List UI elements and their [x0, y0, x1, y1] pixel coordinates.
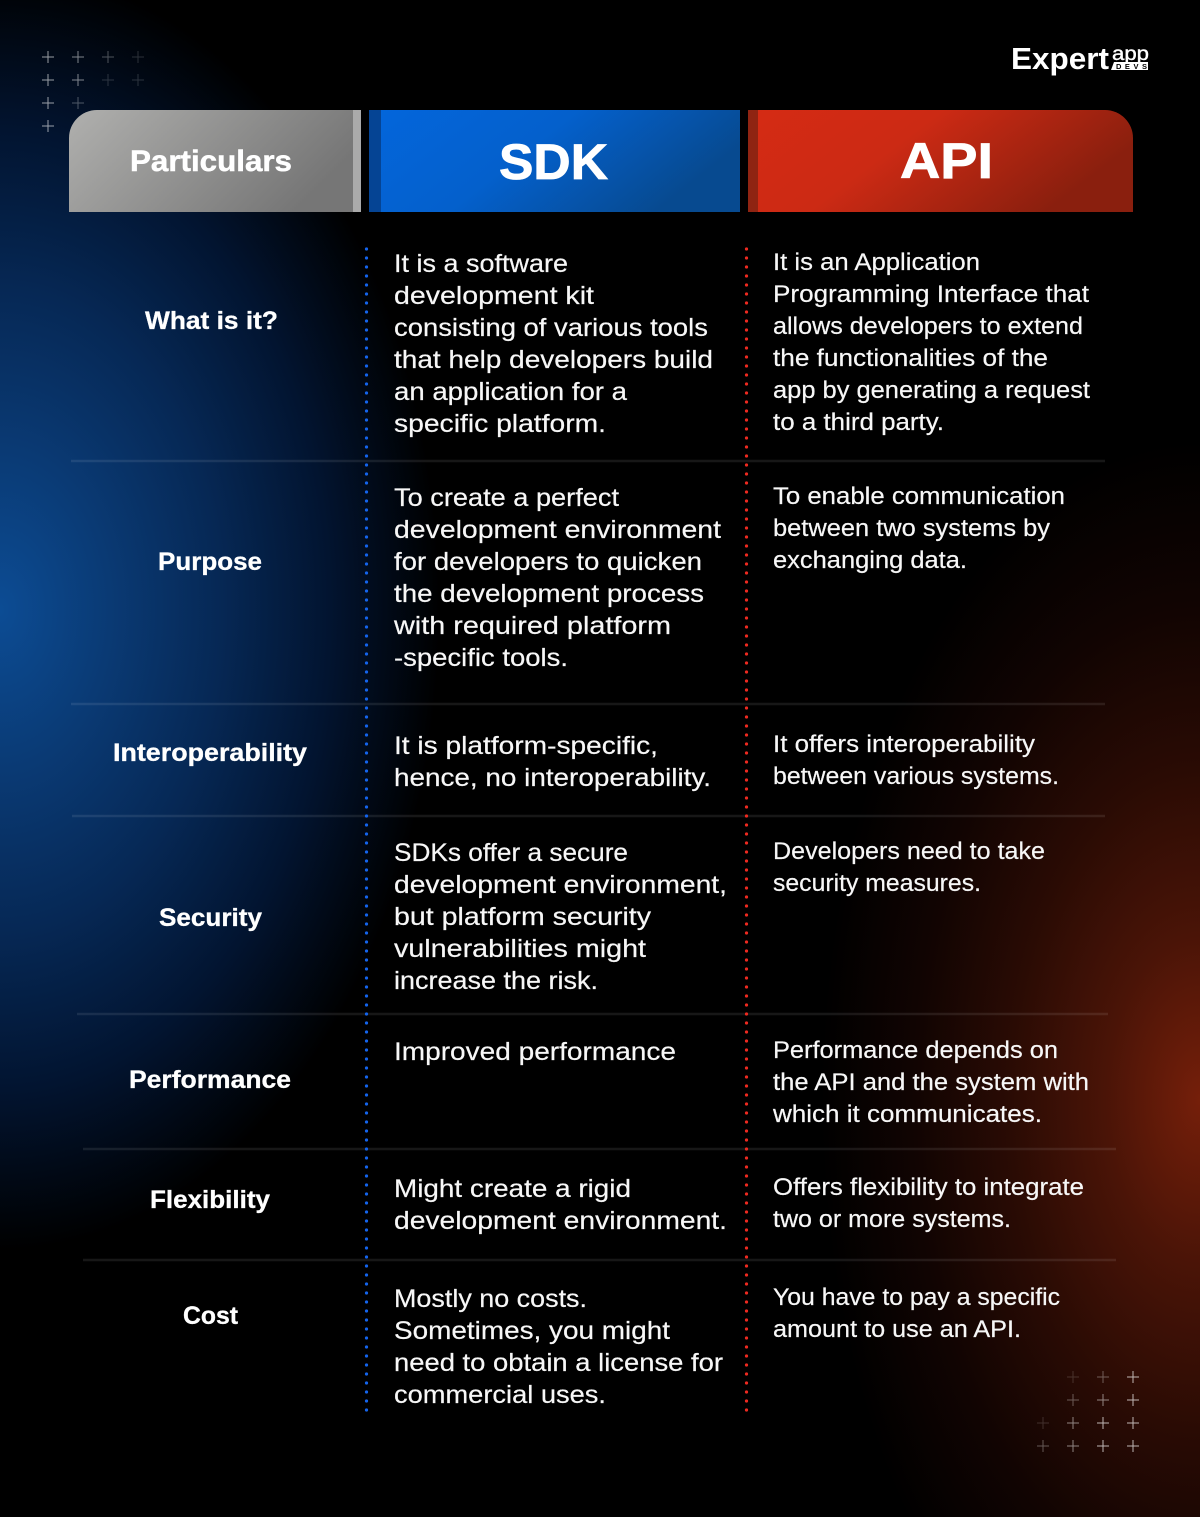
SDK: purpose: -specific tools. [394, 644, 568, 672]
label: Interoperability: Interoperability [113, 739, 307, 767]
SDK: interoperability: It is platform-specific, [394, 732, 658, 760]
SDK: purpose: the development process [394, 580, 704, 608]
API: what is it: Programming Interface that [773, 281, 1089, 308]
SDK: purpose: development environment [394, 516, 721, 544]
row dividers [71, 461, 1116, 1260]
SDK: security: but platform security [394, 903, 652, 931]
API: flexibility [773, 1174, 1084, 1233]
SDK: purpose [393, 484, 721, 672]
API: what is it: allows developers to extend [773, 313, 1083, 340]
SDK: security: increase the risk. [394, 967, 598, 995]
header: SDK: SDK [499, 134, 608, 190]
SDK: cost [394, 1285, 723, 1409]
API: what is it: the functionalities of the [773, 345, 1048, 372]
API: purpose: exchanging data. [773, 547, 967, 574]
SDK: what is it [394, 250, 713, 438]
SDK: security: vulnerabilities might [394, 935, 646, 963]
SDK: interoperability: hence, no interoperability. [394, 764, 711, 792]
SDK: cost: Mostly no costs. [394, 1285, 587, 1313]
API: what is it [773, 249, 1090, 436]
header: API: API [900, 133, 993, 189]
SDK: cost: Sometimes, you might [394, 1317, 670, 1345]
logo: Expert app devs [1011, 41, 1149, 76]
API: what is it: It is an Application [773, 249, 980, 276]
SDK: cost: commercial uses. [394, 1381, 606, 1409]
SDK: cost: need to obtain a license for [394, 1349, 723, 1377]
header: Particulars: Particulars [130, 145, 292, 178]
API: cost: amount to use an API. [773, 1316, 1021, 1343]
API: performance: which it communicates. [772, 1101, 1042, 1128]
API: performance: Performance depends on [773, 1037, 1058, 1064]
SDK: performance: Improved performance [394, 1038, 676, 1066]
API: security: Developers need to take [773, 838, 1045, 865]
header: Particulars [69, 110, 361, 212]
SDK: what is it: It is a software [394, 250, 568, 278]
SDK: purpose: for developers to quicken [394, 548, 702, 576]
API: security [773, 838, 1045, 897]
logo: Expert app devs: DEVS [1116, 62, 1147, 71]
API: interoperability: It offers interoperability [773, 731, 1035, 758]
label: What is it?: What is it? [145, 307, 278, 335]
decorative plus grid bottom right [1037, 1371, 1139, 1452]
dotted divider: SDK column [365, 249, 368, 1413]
API: performance: the API and the system with [773, 1069, 1089, 1096]
header: API [748, 110, 1133, 212]
API: interoperability: between various systems. [773, 763, 1059, 790]
logo: Expert app devs: Expert [1011, 41, 1109, 76]
decorative plus grid top left [42, 51, 144, 132]
API: performance [772, 1037, 1089, 1128]
API: purpose: To enable communication [773, 483, 1065, 510]
SDK: purpose: To create a perfect [394, 484, 619, 512]
API: purpose [773, 483, 1065, 574]
API: cost: You have to pay a specific [773, 1284, 1060, 1311]
SDK: flexibility [394, 1175, 727, 1235]
API: interoperability [773, 731, 1059, 790]
SDK: security: development environment, [394, 871, 727, 899]
SDK: flexibility: development environment. [394, 1207, 727, 1235]
API: flexibility: Offers flexibility to integrate [773, 1174, 1084, 1201]
label: Cost: Cost [183, 1302, 239, 1330]
SDK: security: SDKs offer a secure [394, 839, 628, 867]
SDK: security [394, 839, 727, 995]
API: flexibility: two or more systems. [773, 1206, 1011, 1233]
SDK: what is it: consisting of various tools [394, 314, 708, 342]
header: SDK [369, 110, 740, 212]
SDK: flexibility: Might create a rigid [394, 1175, 631, 1203]
label: Performance: Performance [129, 1066, 291, 1094]
label: Purpose: Purpose [158, 548, 262, 576]
label: Flexibility: Flexibility [150, 1186, 270, 1214]
API: cost [773, 1284, 1060, 1343]
API: purpose: between two systems by [773, 515, 1050, 542]
SDK: what is it: specific platform. [394, 410, 606, 438]
SDK: what is it: an application for a [394, 378, 627, 406]
API: security: security measures. [773, 870, 981, 897]
label: Security: Security [159, 904, 262, 932]
SDK: interoperability [394, 732, 711, 792]
SDK: purpose: with required platform [393, 612, 671, 640]
logo: Expert app devs: app [1112, 44, 1149, 65]
SDK: what is it: development kit [394, 282, 594, 310]
API: what is it: to a third party. [773, 409, 944, 436]
dotted divider: API column [745, 249, 748, 1413]
SDK: what is it: that help developers build [394, 346, 713, 374]
API: what is it: app by generating a request [773, 377, 1090, 404]
